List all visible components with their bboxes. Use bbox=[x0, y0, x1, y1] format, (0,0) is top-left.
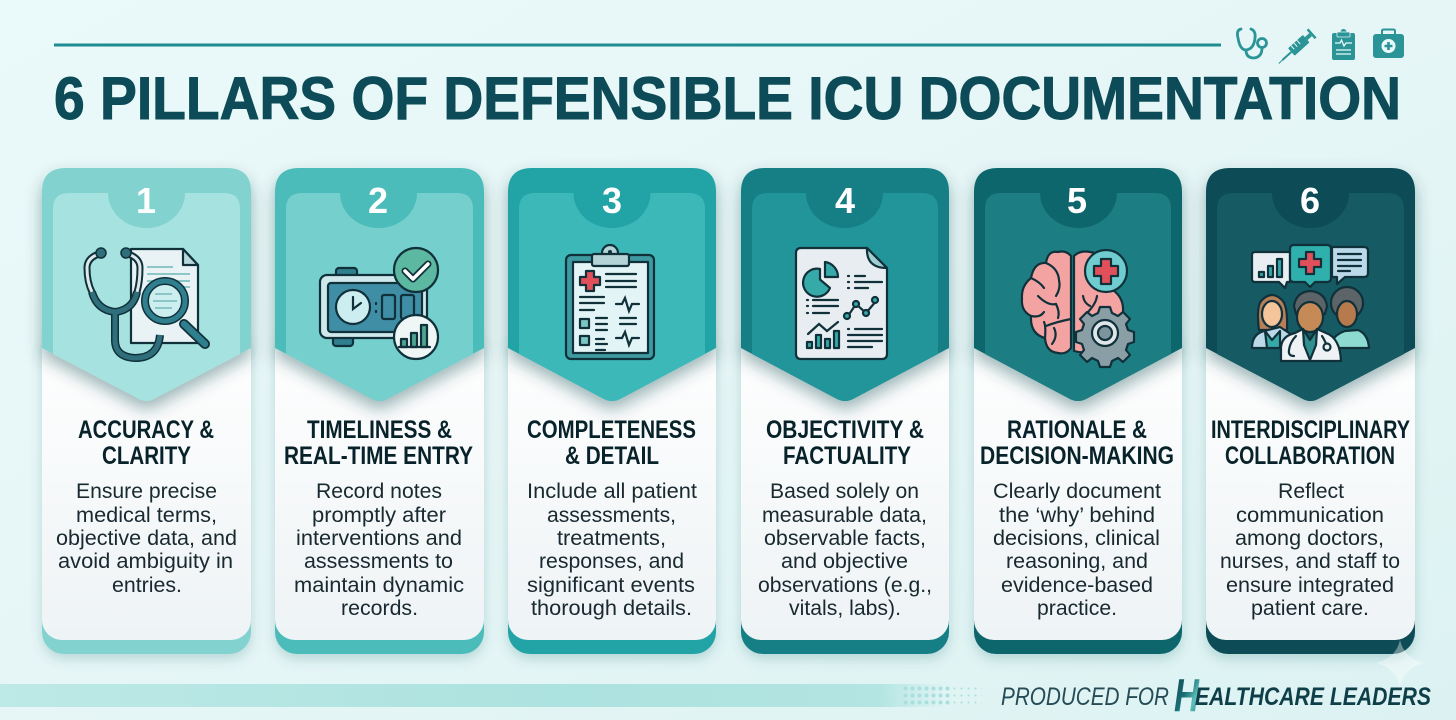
heading 5 bbox=[980, 416, 1174, 470]
description 3 bbox=[527, 480, 697, 620]
description 5: practice. bbox=[1037, 597, 1117, 620]
heading 2 bbox=[284, 416, 473, 470]
description 3: Include all patient bbox=[527, 480, 697, 503]
heading 5: RATIONALE & bbox=[1007, 416, 1147, 444]
number 1: 1 bbox=[136, 180, 156, 221]
description 4: vitals, labs). bbox=[789, 597, 901, 620]
heading 2: TIMELINESS & bbox=[307, 416, 452, 444]
panel: pillar 5 rationale and decision-making bbox=[974, 168, 1182, 654]
icon: report document bbox=[796, 248, 887, 359]
heading 4: OBJECTIVITY & bbox=[766, 416, 924, 444]
card header 3 bbox=[508, 168, 716, 401]
description 5: reasoning, and bbox=[1006, 550, 1148, 573]
description 3: thorough details. bbox=[531, 597, 692, 620]
description 5: decisions, clinical bbox=[993, 527, 1160, 550]
description 2: maintain dynamic bbox=[294, 574, 464, 597]
heading 4: FACTUALITY bbox=[783, 442, 911, 470]
panel: pillar 3 completeness and detail bbox=[508, 168, 716, 654]
heading 5: DECISION-MAKING bbox=[980, 442, 1174, 470]
number 3: 3 bbox=[602, 180, 622, 221]
icon: brain with cross and gear bbox=[1022, 250, 1134, 367]
card header 2 bbox=[275, 168, 484, 401]
footer credit bbox=[1001, 669, 1431, 720]
card base 2 bbox=[275, 330, 484, 654]
icon: clipboard small bbox=[1332, 29, 1355, 60]
description 5: Clearly document bbox=[993, 480, 1161, 503]
description 1 bbox=[56, 480, 237, 597]
icon: medical kit small bbox=[1373, 30, 1404, 58]
description 4: measurable data, bbox=[762, 504, 927, 527]
heading 4 bbox=[766, 416, 924, 470]
watermark star bbox=[1376, 640, 1424, 687]
heading 6: INTERDISCIPLINARY bbox=[1211, 416, 1410, 444]
description 2 bbox=[294, 480, 464, 620]
heading 3: & DETAIL bbox=[565, 442, 659, 470]
description 2: promptly after bbox=[312, 504, 446, 527]
header rule bbox=[54, 44, 1221, 46]
description 4: Based solely on bbox=[770, 480, 919, 503]
heading 2: REAL-TIME ENTRY bbox=[284, 442, 473, 470]
description 5: evidence-based bbox=[1001, 574, 1153, 597]
description 5 bbox=[993, 480, 1161, 620]
card header 6 bbox=[1206, 168, 1415, 401]
card base 5 bbox=[974, 330, 1182, 654]
description 6 bbox=[1220, 480, 1400, 620]
card header 1 bbox=[42, 168, 251, 401]
description 6: among doctors, bbox=[1235, 527, 1384, 550]
description 3: significant events bbox=[527, 574, 695, 597]
footer band bbox=[0, 684, 982, 707]
heading 1: CLARITY bbox=[102, 442, 191, 470]
card header 4 bbox=[741, 168, 949, 401]
heading 3: COMPLETENESS bbox=[527, 416, 696, 444]
description 4: observable facts, bbox=[764, 527, 926, 550]
footer credit: H bbox=[1174, 669, 1200, 720]
description 6: Reflect bbox=[1278, 480, 1344, 503]
heading 3 bbox=[527, 416, 696, 470]
heading 6: COLLABORATION bbox=[1225, 442, 1395, 470]
number 4: 4 bbox=[835, 180, 855, 221]
heading 1 bbox=[78, 416, 214, 470]
panel: pillar 1 accuracy and clarity bbox=[42, 168, 251, 654]
number 5: 5 bbox=[1067, 180, 1087, 221]
description 6: patient care. bbox=[1251, 597, 1369, 620]
description 2: records. bbox=[341, 597, 418, 620]
card header 5 bbox=[974, 168, 1182, 401]
heading 1: ACCURACY & bbox=[78, 416, 214, 444]
card base 3 bbox=[508, 330, 716, 654]
icon: stethoscope and document bbox=[87, 248, 205, 358]
description 6: ensure integrated bbox=[1226, 574, 1394, 597]
footer credit: PRODUCED FOR bbox=[1001, 683, 1169, 711]
icon: clock with check and chart bbox=[320, 248, 438, 359]
header icons bbox=[1237, 28, 1404, 68]
description 4: observations (e.g., bbox=[758, 574, 932, 597]
icon: stethoscope small bbox=[1237, 29, 1266, 58]
description 6: communication bbox=[1236, 504, 1384, 527]
icon: clipboard bbox=[566, 245, 654, 359]
description 6: nurses, and staff to bbox=[1220, 550, 1400, 573]
card base 1 bbox=[42, 330, 251, 654]
icon: care team with speech bubbles bbox=[1252, 245, 1369, 361]
number 2: 2 bbox=[368, 180, 388, 221]
number 6: 6 bbox=[1300, 180, 1320, 221]
description 3: treatments, bbox=[557, 527, 666, 550]
description 5: the ‘why’ behind bbox=[999, 504, 1155, 527]
card base 4 bbox=[741, 330, 949, 654]
description 1: entries. bbox=[112, 574, 182, 597]
description 2: interventions and bbox=[296, 527, 462, 550]
card base 6 bbox=[1206, 330, 1415, 654]
heading 6 bbox=[1211, 416, 1410, 470]
description 2: assessments to bbox=[304, 550, 453, 573]
description 1: medical terms, bbox=[76, 504, 217, 527]
icon: syringe small bbox=[1275, 28, 1317, 68]
description 3: responses, and bbox=[539, 550, 684, 573]
description 1: avoid ambiguity in bbox=[58, 550, 233, 573]
description 4: and objective bbox=[781, 550, 908, 573]
description 1: objective data, and bbox=[56, 527, 237, 550]
description 1: Ensure precise bbox=[76, 480, 217, 503]
panel: pillar 2 timeliness and real-time entry bbox=[275, 168, 484, 654]
description 2: Record notes bbox=[316, 480, 442, 503]
description 4 bbox=[758, 480, 932, 620]
description 3: assessments, bbox=[547, 504, 676, 527]
panel: pillar 4 objectivity and factuality bbox=[741, 168, 949, 654]
panel: pillar 6 interdisciplinary collaboration bbox=[1206, 168, 1415, 654]
